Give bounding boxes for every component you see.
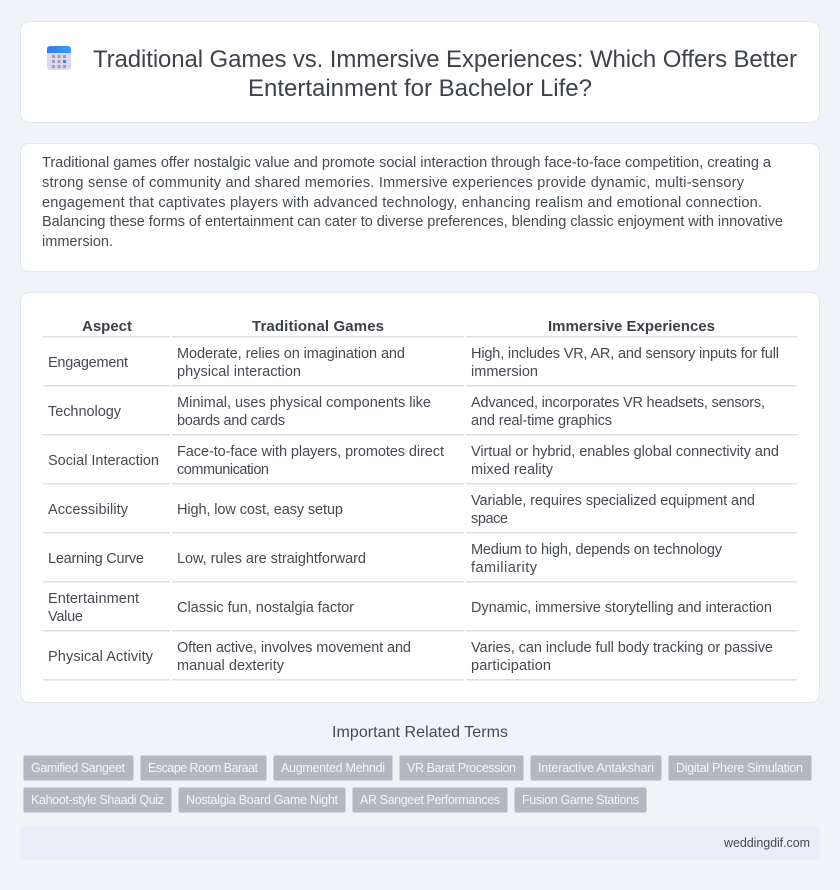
panel: description xyxy=(20,144,820,272)
row: Technology: and real-time graphics xyxy=(471,413,612,429)
text block: description: engagement that captivates players with advanced technology, enhancing realism and emotional connection. xyxy=(42,195,762,211)
related term tags: Nostalgia Board Game Night xyxy=(186,793,339,807)
heading: related terms: Important Related Terms xyxy=(332,724,508,741)
table header: Immersive Experiences xyxy=(548,318,715,335)
table header: Aspect xyxy=(82,318,132,335)
related term tags: Escape Room Baraat xyxy=(148,761,259,775)
text block: description: strong sense of community and shared memories. Immersive experiences provide dynamic, multi-sensory xyxy=(42,175,745,191)
row: Social Interaction: Face-to-face with players, promotes direct xyxy=(177,444,444,460)
related term tags: Fusion Game Stations xyxy=(522,793,639,807)
title: Traditional Games vs. Immersive Experiences: Which Offers Better xyxy=(93,46,797,73)
row: Technology xyxy=(48,395,765,429)
row: Learning Curve: Learning Curve xyxy=(48,551,144,567)
text block: description: Balancing these forms of entertainment can cater to diverse preferences, blending classic enjoyment with innovative xyxy=(42,214,783,230)
row: Learning Curve xyxy=(48,542,723,576)
row: Accessibility: space xyxy=(471,511,508,527)
panel: comparison table xyxy=(20,292,820,702)
title xyxy=(93,46,797,102)
title: Entertainment for Bachelor Life? xyxy=(248,75,592,102)
row: Technology: Advanced, incorporates VR headsets, sensors, xyxy=(471,395,765,411)
related term tags: AR Sangeet Performances xyxy=(360,793,500,807)
row: Technology: Technology xyxy=(48,404,122,420)
row: Engagement xyxy=(48,346,779,380)
row: Learning Curve: familiarity xyxy=(471,560,538,576)
row: Entertainment Value: Dynamic, immersive storytelling and interaction xyxy=(471,600,772,616)
row: Physical Activity: Varies, can include full body tracking or passive xyxy=(471,640,773,656)
row: Technology: Minimal, uses physical components like xyxy=(177,395,431,411)
text block: description: Traditional games offer nostalgic value and promote social interaction through face-to-face competition, creating a xyxy=(42,155,772,171)
panel: header xyxy=(20,22,820,122)
row: Engagement: Moderate, relies on imagination and xyxy=(177,346,405,362)
related term tags xyxy=(24,756,812,812)
row: Entertainment Value: Value xyxy=(48,609,83,625)
row: Entertainment Value: Entertainment xyxy=(48,591,139,607)
icon: calendar xyxy=(47,46,71,70)
row: Physical Activity xyxy=(48,640,773,674)
row: Physical Activity: Physical Activity xyxy=(48,649,154,665)
row: Social Interaction xyxy=(48,444,779,478)
row: Physical Activity: manual dexterity xyxy=(177,658,285,674)
row: Accessibility: High, low cost, easy setup xyxy=(177,502,343,518)
row: Engagement: Engagement xyxy=(48,355,128,371)
related term tags: Interactive Antakshari xyxy=(538,761,654,775)
table header xyxy=(82,318,715,335)
footer bar: weddingdif.com xyxy=(723,836,810,850)
related term tags: Augmented Mehndi xyxy=(281,761,385,775)
row: Learning Curve: Medium to high, depends on technology xyxy=(471,542,723,558)
row: Social Interaction: mixed reality xyxy=(471,462,554,478)
table header: Traditional Games xyxy=(252,318,384,335)
row: Engagement: High, includes VR, AR, and sensory inputs for full xyxy=(471,346,779,362)
row: Technology: boards and cards xyxy=(177,413,285,429)
row: Accessibility xyxy=(48,493,755,527)
row: Social Interaction: communication xyxy=(177,462,269,478)
row: Social Interaction: Virtual or hybrid, enables global connectivity and xyxy=(471,444,779,460)
text block: description: immersion. xyxy=(42,234,113,250)
row: Accessibility: Variable, requires specialized equipment and xyxy=(471,493,755,509)
related term tags: VR Barat Procession xyxy=(407,761,516,775)
row: Physical Activity: Often active, involves movement and xyxy=(177,640,411,656)
related term tags: Gamified Sangeet xyxy=(31,761,126,775)
row: Accessibility: Accessibility xyxy=(48,502,129,518)
row: Entertainment Value xyxy=(48,591,772,625)
related term tags: Digital Phere Simulation xyxy=(676,761,803,775)
text block: description xyxy=(42,155,783,250)
row: Entertainment Value: Classic fun, nostalgia factor xyxy=(177,600,354,616)
row: Engagement: physical interaction xyxy=(177,364,301,380)
row: Physical Activity: participation xyxy=(471,658,551,674)
row: Learning Curve: Low, rules are straightforward xyxy=(177,551,366,567)
row: Social Interaction: Social Interaction xyxy=(48,453,159,469)
footer bar xyxy=(20,826,820,860)
related term tags: Kahoot-style Shaadi Quiz xyxy=(31,793,164,807)
row: Engagement: immersion xyxy=(471,364,538,380)
